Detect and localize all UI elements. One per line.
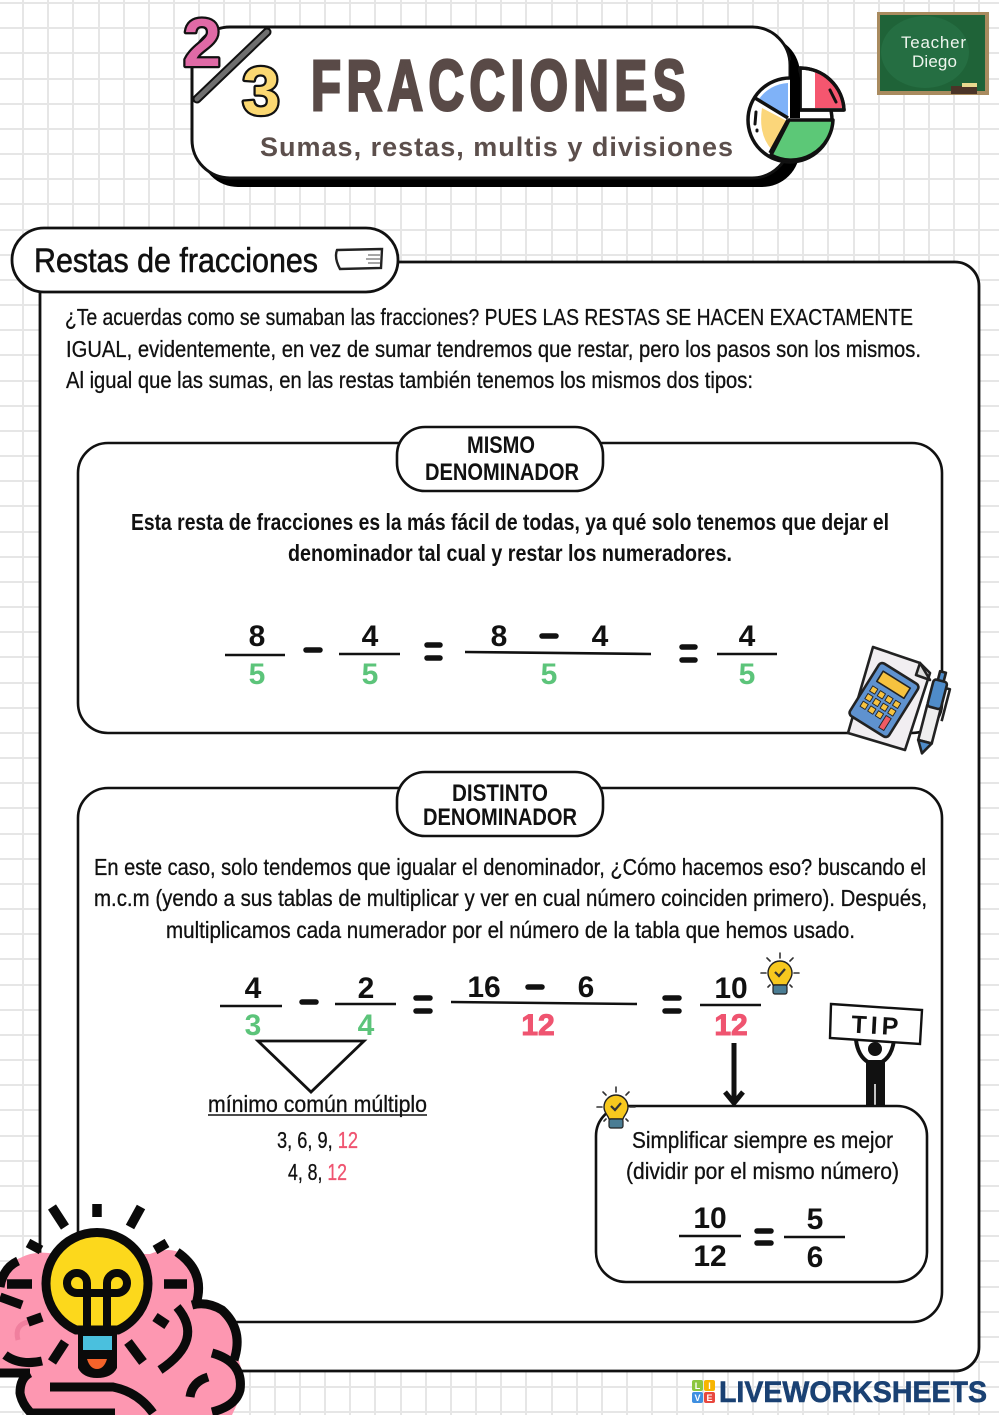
equation: different denominators: 12 (521, 1009, 555, 1042)
equation: same denominator: 5 (249, 658, 265, 691)
panel: mismo denominador (78, 427, 942, 733)
title: FRACCIONES (311, 47, 691, 126)
callout: simplify (596, 1106, 927, 1282)
tab: distinto denominador: DISTINTO (452, 780, 548, 807)
equation: same denominator: 4 (362, 620, 379, 653)
equation: same denominator (225, 620, 777, 691)
tab: distinto denominador: DENOMINADOR (423, 804, 577, 831)
minimum common multiple: mínimo común múltiplo (208, 1091, 427, 1117)
logo: liveworksheets: I (708, 1381, 711, 1391)
panel: restas de fracciones (40, 262, 979, 1371)
icon: blackboard Teacher Diego (877, 12, 989, 95)
equation: simplification: 10 (693, 1202, 727, 1235)
subtitle: Sumas, restas, multis y divisiones (260, 132, 733, 162)
equation: same denominator: 4 (739, 620, 756, 653)
tab: mismo denominador: MISMO (467, 432, 535, 459)
equation: same denominator: 5 (362, 658, 378, 691)
equation: simplification (679, 1202, 845, 1274)
callout: simplify: Simplificar siempre es mejor (632, 1127, 893, 1153)
equation: different denominators: 12 (714, 1009, 748, 1042)
equation: different denominators: 4 (245, 972, 262, 1005)
equation: same denominator: 5 (541, 658, 557, 691)
equation: different denominators: 4 (358, 1009, 375, 1042)
equation: same denominator: 4 (592, 620, 609, 653)
equation: different denominators: 3 (245, 1009, 261, 1042)
minimum common multiple: 4, 8, 12 (288, 1159, 347, 1185)
icon: calculator and pen (848, 647, 954, 756)
icon: lightbulb on callout (597, 1087, 635, 1128)
heading tab: Restas de fracciones: Restas de fracciones (34, 242, 318, 280)
tab: distinto denominador (397, 772, 603, 836)
equation: different denominators: 16 (467, 971, 501, 1004)
icon: TIP sign person (830, 1004, 922, 1106)
icon: pie chart (748, 60, 844, 162)
icon: blackboard Teacher Diego: Teacher (901, 33, 966, 52)
icon: eraser (336, 249, 382, 269)
panel: distinto denominador (78, 772, 942, 1322)
triangle connector (258, 1041, 364, 1092)
intro text (65, 304, 921, 393)
explanation text (94, 854, 927, 943)
tab: mismo denominador (397, 427, 603, 491)
equation: different denominators: 10 (714, 972, 748, 1005)
explanation text (131, 509, 889, 566)
explanation text: multiplicamos cada numerador por el número de la tabla que hemos usado. (166, 917, 855, 943)
header banner (192, 27, 800, 187)
equation: simplification: 5 (807, 1203, 823, 1236)
heading tab: Restas de fracciones (12, 228, 398, 292)
equation: same denominator: 8 (249, 620, 265, 653)
equation: different denominators: 6 (578, 971, 594, 1004)
icon: fraction two thirds: 3 (242, 53, 280, 129)
icon: brain with lightbulb (0, 1204, 243, 1415)
callout: simplify: (dividir por el mismo número) (626, 1158, 899, 1184)
equation: same denominator: 5 (739, 658, 755, 691)
logo: liveworksheets: L (695, 1381, 701, 1391)
icon: TIP sign person: TIP (851, 1011, 903, 1041)
icon: lightbulb near result (761, 953, 799, 994)
minimum common multiple: 3, 6, 9, 12 (277, 1127, 358, 1153)
equation: simplification: 6 (807, 1241, 823, 1274)
tab: mismo denominador: DENOMINADOR (425, 459, 579, 486)
arrow (725, 1043, 743, 1104)
equation: same denominator: 8 (491, 620, 507, 653)
icon: fraction two thirds: 2 (183, 5, 221, 81)
logo: liveworksheets: V (694, 1393, 701, 1403)
explanation text: denominador tal cual y restar los numeradores. (288, 540, 732, 566)
icon: fraction two thirds (183, 5, 280, 129)
logo: liveworksheets: LIVEWORKSHEETS (719, 1376, 987, 1409)
equation: simplification: 12 (693, 1240, 727, 1273)
equation: different denominators: 2 (358, 972, 374, 1005)
intro text: Al igual que las sumas, en las restas también tenemos los mismos dos tipos: (66, 367, 753, 393)
equation: different denominators (220, 971, 761, 1042)
icon: blackboard Teacher Diego: Diego (912, 52, 957, 71)
logo: liveworksheets: E (706, 1393, 713, 1403)
minimum common multiple (208, 1091, 427, 1185)
